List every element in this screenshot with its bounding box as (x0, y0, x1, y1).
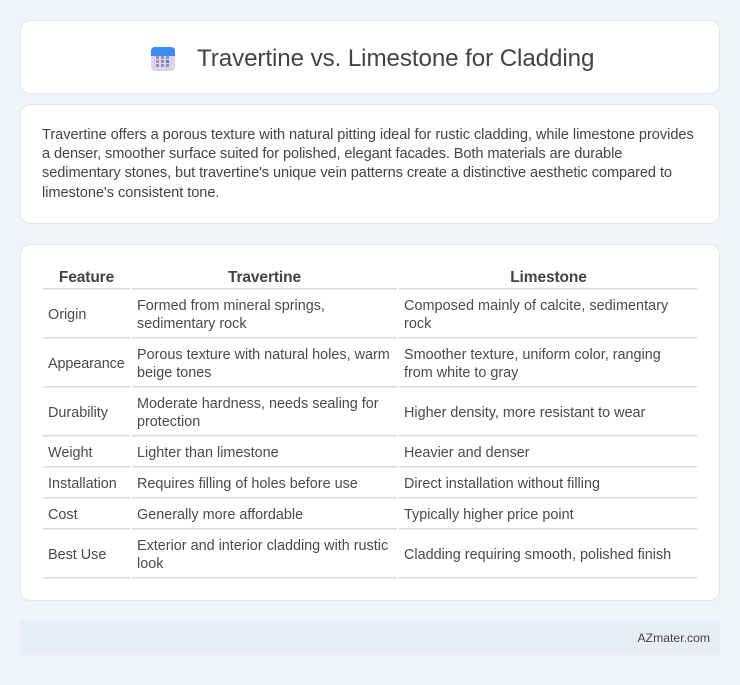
row: Cost: Typically higher price point (404, 507, 574, 523)
row: Best Use (48, 538, 671, 572)
row: Origin: rock (404, 316, 431, 332)
row: Weight: Lighter than limestone (137, 445, 279, 461)
row: Durability: Moderate hardness, needs sealing for (137, 396, 379, 412)
row: Durability (48, 396, 646, 430)
row: Installation (48, 476, 600, 492)
row: Appearance: beige tones (137, 365, 211, 381)
row: Origin: Origin (48, 307, 86, 323)
row: Weight: Heavier and denser (404, 445, 530, 461)
row: Durability: Higher density, more resistant to wear (404, 405, 645, 421)
row: Cost: Cost (48, 507, 78, 523)
row: Best Use: look (137, 556, 163, 572)
intro paragraph: Travertine offers a porous texture with natural pitting ideal for rustic cladding, while limestone provides (42, 127, 694, 143)
row: Origin: Composed mainly of calcite, sedimentary (404, 298, 668, 314)
row: Durability: Durability (48, 405, 108, 421)
footer credit: AZmater.com (638, 631, 710, 645)
row: Origin (48, 298, 668, 332)
row: Origin: Formed from mineral springs, (137, 298, 325, 314)
row: Appearance: Porous texture with natural holes, warm (137, 347, 390, 363)
row: Durability: protection (137, 414, 200, 430)
row: Appearance (48, 347, 661, 381)
intro paragraph: a denser, smoother surface suited for polished, elegant facades. Both materials are durable (42, 146, 622, 162)
row: Installation: Installation (48, 476, 117, 492)
row: Best Use: Exterior and interior cladding with rustic (137, 538, 388, 554)
intro paragraph: sedimentary stones, but travertine's unique vein patterns create a distinctive aesthetic compared to (42, 165, 672, 181)
row: Best Use: Cladding requiring smooth, polished finish (404, 547, 671, 563)
panel: title card (20, 20, 720, 94)
panel: comparison table (20, 244, 720, 601)
table header: Limestone (510, 269, 587, 286)
title: Travertine vs. Limestone for Cladding (197, 45, 594, 72)
table header (59, 269, 587, 286)
row: Best Use: Best Use (48, 547, 106, 563)
row: Origin: sedimentary rock (137, 316, 247, 332)
row: Cost: Generally more affordable (137, 507, 303, 523)
comparison table (43, 269, 697, 579)
intro paragraph (42, 127, 694, 201)
icon: calendar (151, 47, 175, 71)
table header: Travertine (228, 269, 301, 286)
row: Appearance: Appearance (48, 356, 125, 372)
row: Weight (48, 445, 530, 461)
row: Appearance: from white to gray (404, 365, 518, 381)
row: Cost (48, 507, 574, 523)
row: Appearance: Smoother texture, uniform color, ranging (404, 347, 661, 363)
intro paragraph: limestone's consistent tone. (42, 185, 219, 201)
footer bar (20, 621, 720, 655)
row: Installation: Requires filling of holes before use (137, 476, 358, 492)
row: Weight: Weight (48, 445, 93, 461)
table header: Feature (59, 269, 114, 286)
panel: intro text (20, 104, 720, 224)
row: Installation: Direct installation without filling (404, 476, 600, 492)
